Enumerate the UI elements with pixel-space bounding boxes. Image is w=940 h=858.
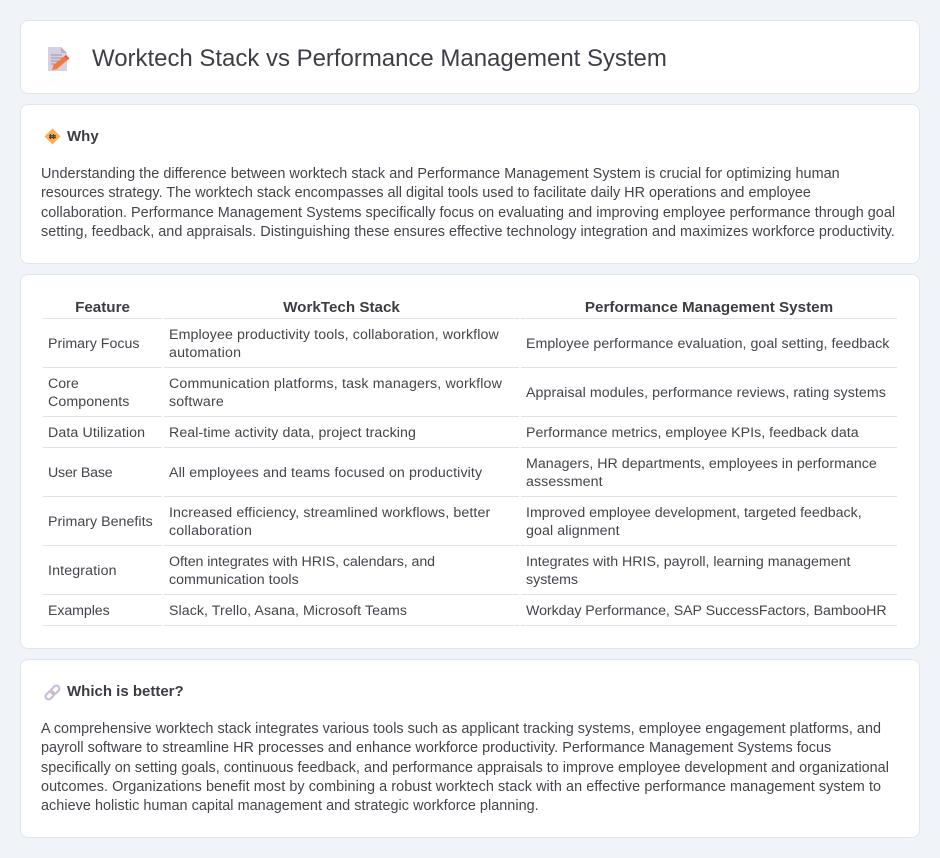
row: user base: User Base [48,465,112,481]
table header [75,299,833,316]
text block: which is better: outcomes. Organizations benefit most by combining a robust worktech stack with an effective performance management system to [41,779,881,795]
row: examples: Workday Performance, SAP SuccessFactors, BambooHR [526,603,887,619]
row: data utilization [48,425,859,441]
row: core components: Components [48,394,129,410]
row: core components: Appraisal modules, performance reviews, rating systems [526,385,886,401]
row: core components: Core [48,376,79,392]
row: user base [48,456,877,490]
row: primary focus: Primary Focus [48,336,139,352]
row: examples [48,603,887,619]
text block: which is better: specifically on setting goals, continuous feedback, and performance appraisals to improve employee development and organizational [41,760,889,776]
title: Worktech Stack vs Performance Management System [92,45,667,72]
heading: why: Why [67,128,99,145]
text block: why: setting, feedback, and appraisals. Distinguishing these ensures effective technology integration and maximizes workforce productivity. [41,224,895,240]
row: integration: Integration [48,563,117,579]
text block: why: collaboration. Performance Management Systems specifically focus on evaluating and improving employee performance through goal [41,205,895,221]
panel: comparison table [20,274,920,649]
row: primary benefits: Increased efficiency, streamlined workflows, better [169,505,490,521]
row: core components: software [169,394,224,410]
icon: warning diamond [44,128,60,144]
row: integration: systems [526,572,578,588]
panel: title header [20,20,920,94]
row: primary benefits [48,505,862,539]
row: primary focus [48,327,890,361]
row: data utilization: Performance metrics, employee KPIs, feedback data [526,425,859,441]
panel: why [20,104,920,264]
text block: why [41,166,895,240]
text block: why: resources strategy. The worktech stack encompasses all digital tools used to facilitate daily HR operations and employee [41,185,811,201]
panel: which is better [20,659,920,838]
row: examples: Examples [48,603,110,619]
table header: Performance Management System [585,299,833,316]
text block: which is better: payroll software to streamline HR processes and enhance workforce productivity. Performance Management Systems focus [41,740,831,756]
row: primary focus: automation [169,345,241,361]
row: user base: assessment [526,474,603,490]
row: core components: Communication platforms, task managers, workflow [169,376,502,392]
text block: which is better [41,721,889,814]
row: integration: Often integrates with HRIS, calendars, and [169,554,435,570]
row: integration: Integrates with HRIS, payroll, learning management [526,554,850,570]
row: primary benefits: goal alignment [526,523,620,539]
row: primary focus: Employee productivity tools, collaboration, workflow [169,327,499,343]
text block: which is better: achieve holistic human capital management and strategic workforce planning. [41,798,539,814]
heading: which is better: Which is better? [67,683,184,700]
row: integration: communication tools [169,572,299,588]
text block: which is better: A comprehensive worktech stack integrates various tools such as applicant tracking systems, employee engagement platforms, and [41,721,881,737]
row: primary benefits: collaboration [169,523,252,539]
row: core components [48,376,886,410]
row: user base: Managers, HR departments, employees in performance [526,456,877,472]
row: user base: All employees and teams focused on productivity [169,465,482,481]
row: data utilization: Data Utilization [48,425,145,441]
row: primary benefits: Primary Benefits [48,514,153,530]
table header: Feature [75,299,130,316]
icon: chain link [44,684,60,700]
table header: WorkTech Stack [283,299,400,316]
text block: why: Understanding the difference between worktech stack and Performance Management System is crucial for optimizing human [41,166,840,182]
row: primary focus: Employee performance evaluation, goal setting, feedback [526,336,889,352]
row: primary benefits: Improved employee development, targeted feedback, [526,505,862,521]
icon: document with pencil [48,47,70,71]
row: integration [48,554,850,588]
row: data utilization: Real-time activity data, project tracking [169,425,416,441]
row: examples: Slack, Trello, Asana, Microsoft Teams [169,603,407,619]
